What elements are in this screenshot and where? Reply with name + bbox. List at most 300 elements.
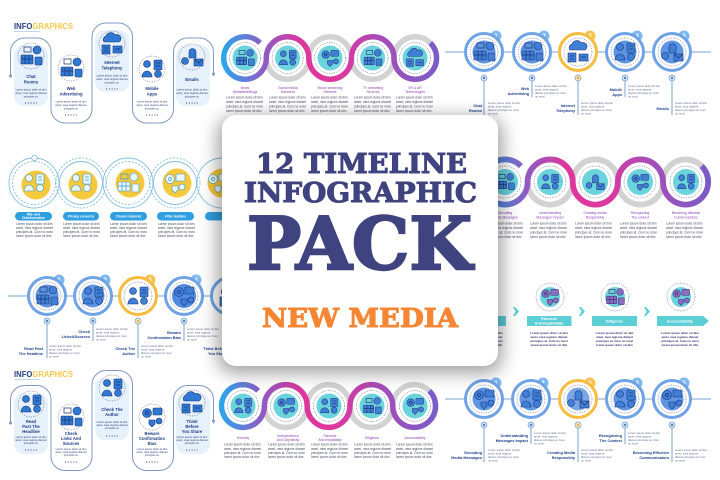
step text: Internet: [561, 103, 576, 108]
step text: Lorem ipsum dolor sit dim: [628, 431, 661, 435]
step text: no movi: [488, 458, 498, 462]
step text: Beware: [167, 330, 182, 335]
column text: amet, mea regione diamet: [596, 335, 633, 339]
column text: principes at. Cum no movi: [396, 104, 433, 108]
column text: principes at. Cum no movi: [530, 339, 568, 343]
column text: Websites&Blogs: [233, 90, 258, 94]
column text: Lorem ipsum dolor sit dim: [396, 442, 433, 446]
step text: diamet principes at. Cum: [534, 438, 566, 442]
step: think before you share: amet, mea regione diamet: [176, 438, 208, 442]
column text: Social media: [278, 86, 298, 90]
column text: Lorem ipsum dolor sit dim: [16, 222, 53, 226]
column text: lorem ipsum dolor sit dim: [575, 235, 611, 239]
step text: Chat: [473, 103, 483, 108]
column text: lorem ipsum dolor sit dim: [666, 235, 702, 239]
step 2: [514, 30, 550, 81]
column text: principes at. Cum no movi: [268, 451, 305, 455]
step: chat rooms: amet, mea regione diamet: [15, 91, 47, 95]
column text: lorem ipsum dolor sit dim: [63, 234, 99, 238]
step: read past the headline: principes at.: [24, 441, 38, 445]
step: mobile apps: [136, 56, 168, 115]
step: chat rooms: [15, 43, 47, 103]
step text: diamet principes at. Cum: [141, 351, 173, 355]
column text: [465, 331, 699, 347]
brand heading: INFOGRAPHICS: [14, 370, 74, 379]
step: web advertising: Lorem ipsum dolor sit dim: [56, 100, 87, 104]
step text: amet, mea regione: [488, 452, 512, 456]
column text: amet, mea regione diamet: [354, 447, 391, 451]
column text: principes at. Cum no movi: [596, 339, 633, 343]
column text: principes at. Cum no movi: [666, 230, 703, 234]
step text: Check: [78, 329, 91, 334]
step text: Lorem ipsum dolor sit dim: [581, 101, 614, 105]
column text: lorem ipsum dolor sit dim: [486, 235, 522, 239]
column text: lorem ipsum dolor sit dim: [354, 455, 390, 459]
step: emails: [176, 44, 208, 103]
step: beware confirmation bias: Lorem ipsum dolor sit dim: [137, 447, 168, 451]
column text: Lorem ipsum dolor sit dim: [226, 96, 263, 100]
step text: no movi: [488, 112, 498, 116]
column text: Accountability: [405, 436, 426, 440]
step text: Apps: [612, 92, 622, 97]
pill labels: Disinformation: [22, 216, 45, 220]
box labels: Accountability: [667, 320, 694, 324]
panel: vertical capsule timeline, top left: [9, 22, 215, 123]
column text: amet, mea regione diamet: [662, 335, 698, 339]
pill labels: [22, 212, 186, 220]
step text: amet, mea regione: [187, 330, 211, 334]
column text: principes at. Cum no movi: [16, 230, 53, 234]
step text: Lorem ipsum dolor sit dim: [675, 101, 708, 105]
column text: principes at. Cum no movi: [465, 339, 503, 343]
column text: principes at. Cum no movi: [486, 230, 523, 234]
title line: 12 timeline: 12 TIMELINE: [256, 148, 467, 180]
step text: diamet principes at. Cum: [488, 455, 520, 459]
panel: teal arrow timeline, lower right: [462, 283, 709, 347]
circle icons: [230, 42, 430, 74]
step text: no movi: [49, 354, 59, 358]
step text: Read Past: [24, 346, 44, 351]
step: check the author: Lorem ipsum dolor sit dim: [97, 420, 128, 424]
panel: wave timeline, bottom centre: [222, 385, 436, 459]
column text: amet, mea regione diamet: [531, 335, 567, 339]
circle icons: [228, 390, 430, 422]
column text: Fairness: [323, 434, 337, 438]
step: check links and sources: principes at.: [64, 453, 78, 457]
step: think before you share: Lorem ipsum dolor sit dim: [177, 435, 208, 439]
step text: no movi: [534, 442, 544, 446]
step: read past the headline: Headline: [22, 429, 40, 434]
step text: Decoding: [464, 450, 483, 455]
column text: lorem ipsum dolor sit dim: [531, 343, 568, 347]
step: check links and sources: Lorem ipsum dolor sit dim: [56, 447, 87, 451]
step: read past the headline: Read: [26, 419, 37, 424]
step text: Understanding: [501, 433, 529, 438]
step 3: 3: [148, 278, 152, 284]
column text: amet, mea regione diamet: [466, 335, 502, 339]
column text: Lorem ipsum dolor sit dim: [465, 331, 503, 335]
step text: diamet principes at. Cum: [581, 108, 613, 112]
step text: The Context: [600, 438, 623, 443]
box labels: And Impartiality: [535, 322, 564, 326]
column text: TV streaming: [363, 86, 383, 90]
step text: diamet principes at. Cum: [581, 455, 613, 459]
step: check the author: amet, mea regione diamet: [96, 423, 128, 427]
column text: Recognizing: [631, 211, 649, 215]
step text: amet, mea regione: [675, 104, 699, 108]
column text: Lorem ipsum dolor sit dim: [268, 442, 305, 446]
step text: amet, mea regione: [141, 348, 165, 352]
step text: Web: [521, 86, 530, 91]
step: beware confirmation bias: principes at.: [145, 453, 159, 457]
step text: diamet principes at. Cum: [535, 91, 567, 95]
column text: VR & AR: [408, 86, 422, 90]
step: mobile apps: Apps: [147, 92, 158, 96]
step: web advertising: principes at.: [64, 106, 78, 110]
step text: Emails: [656, 106, 669, 111]
step 5: 5: [682, 381, 686, 387]
step 2: [74, 274, 112, 324]
panel: vertical capsule timeline, bottom left: [9, 370, 215, 470]
column text: principes at. Cum no movi: [311, 451, 348, 455]
column text: Lorem ipsum dolor sit dim: [63, 222, 100, 226]
column text: Lorem ipsum dolor sit dim: [269, 96, 306, 100]
step 5: [212, 278, 248, 314]
step: think before you share: [176, 390, 208, 450]
column text: lorem ipsum dolor sit dim: [16, 234, 52, 238]
step: check the author: Author: [105, 412, 119, 417]
step: think before you share: Before: [185, 424, 199, 429]
step 2: [512, 378, 550, 428]
column text: amet, mea regione diamet: [268, 447, 305, 451]
step text: Lorem ipsum dolor sit dim: [187, 327, 220, 331]
column text: Lorem ipsum dolor sit dim: [311, 442, 348, 446]
column text: principes at. Cum no movi: [530, 230, 567, 234]
column text: principes at. Cum no movi: [224, 451, 261, 455]
step 2: 2: [541, 381, 545, 387]
step: check the author: Check The: [101, 407, 123, 412]
column text: amet, mea regione diamet: [530, 226, 567, 230]
step: beware confirmation bias: Bias: [148, 441, 157, 446]
subtitle: new media: NEW MEDIA: [262, 303, 458, 334]
step text: Media Messages: [451, 455, 482, 460]
step: think before you share: Think: [186, 419, 198, 424]
step text: diamet principes at. Cum: [675, 455, 707, 459]
step text: no movi: [628, 94, 638, 98]
column text: lorem ipsum dolor sit dim: [269, 109, 305, 113]
step text: diamet principes at. Cum: [488, 108, 520, 112]
column text: lorem ipsum dolor sit dim: [396, 455, 432, 459]
step text: amet, mea regione: [535, 88, 559, 92]
icons: [536, 283, 695, 311]
pill labels: Mis- and: [27, 212, 40, 216]
icons: [22, 168, 236, 200]
column text: amet, mea regione diamet: [16, 226, 53, 230]
column text: lorem ipsum dolor sit dim: [224, 455, 260, 459]
step text: no movi: [96, 338, 106, 342]
step: web advertising: amet, mea regione diamet: [55, 103, 87, 107]
column text: Becoming effective: [672, 211, 700, 215]
column text: Services: [366, 90, 380, 94]
step text: amet, mea regione: [96, 330, 120, 334]
box labels: [535, 317, 694, 326]
step text: diamet principes at. Cum: [96, 334, 128, 338]
step text: [451, 431, 708, 462]
step 4: [606, 378, 644, 428]
step text: Communicators: [639, 455, 669, 460]
column text: lorem ipsum dolor sit dim: [311, 455, 347, 459]
column text: Lorem ipsum dolor sit dim: [110, 222, 147, 226]
column text: lorem ipsum dolor sit dim: [466, 343, 503, 347]
column text: amet, mea regione diamet: [486, 226, 523, 230]
column text: [226, 86, 433, 113]
column text: Communicators: [674, 216, 698, 220]
step text: amet, mea regione: [628, 88, 652, 92]
pill labels: Filter bubbles: [165, 214, 186, 218]
column text: lorem ipsum dolor sit dim: [110, 234, 146, 238]
teal label boxes: [462, 316, 709, 326]
step text: amet, mea regione: [581, 104, 605, 108]
step: think before you share: You Share: [182, 429, 203, 434]
column text: Technologies: [405, 90, 425, 94]
pill labels: Closed networks: [116, 214, 141, 218]
step: internet telephony: Lorem ipsum dolor sit dim: [97, 74, 128, 78]
step 3: 3: [588, 381, 592, 387]
step text: Lorem ipsum dolor sit dim: [488, 448, 521, 452]
step text: diamet principes at. Cum: [187, 334, 219, 338]
step 5: [654, 378, 690, 428]
step: read past the headline: Past The: [22, 424, 40, 429]
step text: Responsibly: [552, 455, 576, 460]
step 5: 5: [682, 34, 686, 40]
step text: no movi: [628, 442, 638, 446]
column text: Lorem ipsum dolor sit dim: [486, 222, 523, 226]
brand heading: INFOGRAPHICS: [14, 22, 74, 31]
step 4: [606, 30, 644, 81]
step text: Lorem ipsum dolor sit dim: [96, 327, 129, 331]
step text: Becoming Effective: [633, 450, 670, 455]
step: mobile apps: principes at.: [145, 106, 159, 110]
step text: Lorem ipsum dolor sit dim: [581, 448, 614, 452]
column text: Lorem ipsum dolor sit dim: [530, 222, 567, 226]
column text: principes at. Cum no movi: [226, 104, 263, 108]
step 2: 2: [103, 278, 107, 284]
column text: Understanding: [539, 211, 561, 215]
title line: infographic: INFOGRAPHIC: [244, 177, 477, 209]
step text: no movi: [581, 112, 591, 116]
step text: Mobile: [610, 87, 623, 92]
step text: amet, mea regione: [581, 452, 605, 456]
step: mobile apps: Mobile: [145, 86, 159, 91]
column text: amet, mea regione diamet: [396, 447, 433, 451]
step text: Messages Impact: [496, 438, 529, 443]
column text: Media Messages: [492, 216, 518, 220]
step text: Lorem ipsum dolor sit dim: [49, 344, 82, 348]
step: read past the headline: Lorem ipsum dolor sit dim: [16, 435, 47, 439]
column text: principes at. Cum no movi: [110, 230, 147, 234]
step: check links and sources: Check: [65, 431, 78, 436]
column text: Lorem ipsum dolor sit dim: [596, 331, 634, 335]
step: think before you share: principes at.: [185, 441, 199, 445]
column text: Lorem ipsum dolor sit dim: [396, 96, 433, 100]
column text: Messages' Impact: [536, 216, 564, 220]
step 4: 4: [194, 278, 198, 284]
column text: amet, mea regione diamet: [354, 100, 391, 104]
step: web advertising: [55, 55, 87, 115]
step: chat rooms: Rooms: [24, 80, 39, 84]
step: chat rooms: Chat: [26, 74, 36, 79]
column text: Independence: [277, 434, 299, 438]
step: beware confirmation bias: [136, 404, 168, 462]
column text: amet, mea regione diamet: [158, 226, 195, 230]
step: emails: Lorem ipsum dolor sit dim: [177, 88, 208, 92]
step text: You Share: [208, 351, 228, 356]
column text: amet, mea regione diamet: [63, 226, 100, 230]
box labels: Diligence: [606, 320, 623, 324]
step 4: 4: [635, 381, 639, 387]
step text: Recognizing: [599, 433, 623, 438]
step text: diamet principes at. Cum: [675, 108, 707, 112]
step text: amet, mea regione: [488, 104, 512, 108]
step 1: [466, 378, 502, 428]
step text: Lorem ipsum dolor sit dim: [675, 448, 708, 452]
step text: Rooms: [469, 108, 482, 113]
step text: no movi: [675, 112, 685, 116]
column text: Lorem ipsum dolor sit dim: [224, 442, 261, 446]
column text: Diligence: [365, 436, 379, 440]
step text: amet, mea regione: [49, 348, 73, 352]
step: check the author: [96, 375, 128, 436]
column text: lorem ipsum dolor sit dim: [596, 343, 633, 347]
chevrons: [513, 307, 650, 316]
column text: Honesty: [237, 436, 250, 440]
column text: [16, 222, 195, 238]
column text: lorem ipsum dolor sit dim: [268, 455, 304, 459]
step 2: 2: [542, 34, 546, 40]
step: check the author: principes at.: [105, 426, 119, 430]
column text: Music streaming: [318, 86, 342, 90]
step text: amet, mea regione: [675, 452, 699, 456]
step text: no movi: [141, 354, 151, 358]
step text: [19, 327, 228, 358]
step 1: 1: [494, 381, 498, 387]
central title card: [222, 115, 498, 366]
column text: amet, mea regione diamet: [226, 100, 263, 104]
column text: principes at. Cum no movi: [63, 230, 100, 234]
step text: Creating Media: [547, 450, 576, 455]
column text: Services: [323, 90, 337, 94]
step text: Check The: [115, 346, 136, 351]
step 1: 1: [57, 278, 61, 284]
column text: Lorem ipsum dolor sit dim: [158, 222, 195, 226]
column text: Decoding: [498, 211, 512, 215]
step 4: 4: [635, 34, 639, 40]
step: web advertising: Advertising: [59, 92, 83, 96]
step: emails: amet, mea regione diamet: [176, 91, 208, 95]
step: mobile apps: Lorem ipsum dolor sit dim: [137, 100, 168, 104]
column text: amet, mea regione diamet: [311, 447, 348, 451]
step: emails: principes at.: [185, 94, 199, 98]
column text: Lorem ipsum dolor sit dim: [661, 331, 699, 335]
column text: lorem ipsum dolor sit dim: [311, 109, 347, 113]
column text: lorem ipsum dolor sit dim: [620, 235, 656, 239]
step: read past the headline: amet, mea regione diamet: [15, 438, 47, 442]
step: check links and sources: Links And: [61, 436, 81, 441]
step text: Think Before: [203, 346, 228, 351]
step text: Author: [122, 351, 135, 356]
column text: principes at. Cum no movi: [620, 230, 657, 234]
step 5: [654, 30, 690, 81]
column text: News: [241, 86, 250, 90]
step text: no movi: [675, 458, 685, 462]
step 3: [560, 378, 596, 428]
step: chat rooms: Lorem ipsum dolor sit dim: [16, 88, 47, 92]
column text: amet, mea regione diamet: [269, 100, 306, 104]
step: internet telephony: Telephony: [102, 66, 123, 70]
column text: lorem ipsum dolor sit dim: [354, 109, 390, 113]
column text: [486, 211, 703, 239]
rings: [9, 155, 247, 208]
column text: principes at. Cum no movi: [158, 230, 195, 234]
step: internet telephony: principes at.: [105, 80, 119, 84]
step: check links and sources: amet, mea regione diamet: [55, 450, 87, 454]
box labels: Fairness: [541, 317, 557, 321]
column text: principes at. Cum no movi: [661, 339, 699, 343]
step text: Lorem ipsum dolor sit dim: [141, 344, 174, 348]
column text: Lorem ipsum dolor sit dim: [666, 222, 703, 226]
step text: diamet principes at. Cum: [628, 438, 660, 442]
step: emails: Emails: [185, 77, 199, 82]
column text: Lorem ipsum dolor sit dim: [354, 442, 391, 446]
step 1: [28, 274, 66, 324]
column text: Lorem ipsum dolor sit dim: [354, 96, 391, 100]
step text: Advertising: [508, 91, 530, 96]
step: beware confirmation bias: Confirmation: [139, 436, 165, 441]
step text: diamet principes at. Cum: [628, 91, 660, 95]
step text: Lorem ipsum dolor sit dim: [535, 84, 568, 88]
column text: Lorem ipsum dolor sit dim: [575, 222, 612, 226]
column text: amet, mea regione diamet: [666, 226, 703, 230]
column text: principes at. Cum no movi: [311, 104, 348, 108]
step text: no movi: [535, 94, 545, 98]
step text: Lorem ipsum dolor sit dim: [534, 431, 567, 435]
column text: amet, mea regione diamet: [575, 226, 612, 230]
step: internet telephony: [96, 31, 128, 89]
column text: amet, mea regione diamet: [110, 226, 147, 230]
column text: [224, 434, 433, 459]
column text: Responsibly: [586, 216, 605, 220]
step: beware confirmation bias: amet, mea regione diamet: [136, 450, 168, 454]
step 4: [166, 274, 202, 324]
title line: pack: PACK: [247, 201, 474, 286]
step 3: [560, 30, 596, 81]
step: check links and sources: [55, 404, 87, 462]
column text: lorem ipsum dolor sit dim: [226, 109, 262, 113]
column text: And Objectivity: [277, 438, 300, 442]
column text: lorem ipsum dolor sit dim: [530, 235, 566, 239]
column text: principes at. Cum no movi: [354, 451, 391, 455]
pills: [15, 212, 235, 220]
step 1: 1: [494, 34, 498, 40]
column text: The context: [631, 216, 649, 220]
step text: amet, mea regione: [628, 434, 652, 438]
step: mobile apps: amet, mea regione diamet: [136, 103, 168, 107]
step: read past the headline: [15, 391, 47, 450]
panel: wave timeline, middle right: [482, 159, 708, 239]
column text: amet, mea regione diamet: [396, 100, 433, 104]
step text: Confirmation Bias: [147, 335, 181, 340]
circle icons: [489, 166, 702, 198]
